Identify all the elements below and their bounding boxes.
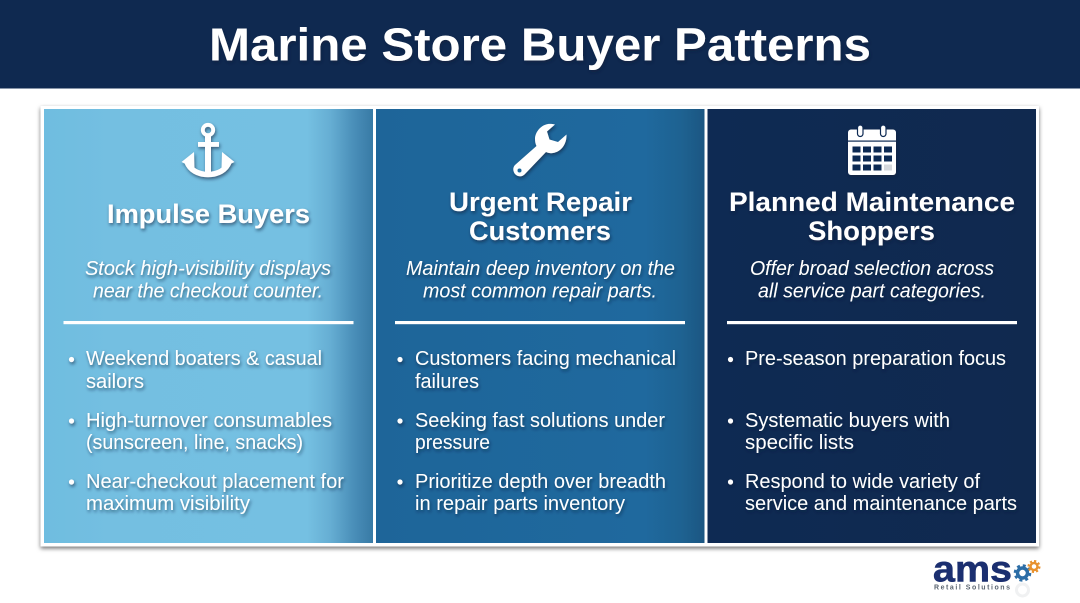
strategy text: impulse buyers: near the checkout counter. [93,280,323,302]
logo: AMS Retail Solutions [933,548,1040,596]
bullet list: urgent repair: Seeking fast solutions under [415,410,665,432]
panel: urgent repair customers [376,109,704,543]
heading: impulse buyers: Impulse Buyers [107,199,310,229]
title: Marine Store Buyer Patterns [209,18,871,70]
panel: impulse buyers [44,109,373,543]
strategy text: impulse buyers [85,258,331,302]
bullet list: urgent repair [397,348,676,515]
bullet list: impulse buyers: sailors [86,371,144,393]
heading: urgent repair customers: Customers [469,216,611,246]
strategy text: impulse buyers: Stock high-visibility displays [85,258,331,280]
bullet list: impulse buyers: Near-checkout placement for [86,471,344,493]
icon: wrench [513,124,567,176]
panel: planned maintenance shoppers [708,109,1036,543]
header banner [0,0,1080,88]
bullet list: planned maintenance: Respond to wide variety of [745,471,980,493]
logo: AMS Retail Solutions: ams [933,548,1012,590]
icon: calendar [848,125,896,175]
strategy text: planned maintenance: Offer broad selection across [750,258,994,280]
bullet list: urgent repair: failures [415,371,479,393]
bullet list: urgent repair: pressure [415,432,490,454]
bullet list: planned maintenance: Pre-season preparation focus [745,348,1006,370]
bullet list: planned maintenance: specific lists [745,432,854,454]
bullet list: impulse buyers [69,348,344,515]
strategy text: urgent repair [406,258,675,302]
bullet list: impulse buyers: High-turnover consumables [86,410,332,432]
heading: planned maintenance shoppers [729,187,1015,246]
bullet list: planned maintenance: Systematic buyers with [745,410,950,432]
heading: planned maintenance shoppers: Planned Maintenance [729,187,1015,217]
strategy text: planned maintenance [750,258,994,302]
bullet list: urgent repair: Prioritize depth over breadth [415,471,666,493]
bullet list: urgent repair: Customers facing mechanical [415,348,676,370]
icon: anchor [182,125,234,176]
heading: urgent repair customers [449,187,632,246]
bullet list: urgent repair: in repair parts inventory [415,493,625,515]
strategy text: urgent repair: Maintain deep inventory on the [406,258,675,280]
bullet list: impulse buyers: maximum visibility [86,493,250,515]
bullet list: impulse buyers: Weekend boaters & casual [86,348,322,370]
bullet list: impulse buyers: (sunscreen, line, snacks) [86,432,303,454]
panels frame [40,106,1039,546]
bullet list: planned maintenance: service and maintenance parts [745,493,1017,515]
bullet list: planned maintenance [728,348,1017,515]
strategy text: planned maintenance: all service part categories. [758,280,986,302]
icon: gears [1015,561,1040,596]
logo: AMS Retail Solutions: Retail Solutions [934,584,1010,592]
strategy text: urgent repair: most common repair parts. [423,280,657,302]
heading: urgent repair customers: Urgent Repair [449,187,632,217]
heading: planned maintenance shoppers: Shoppers [808,216,935,246]
